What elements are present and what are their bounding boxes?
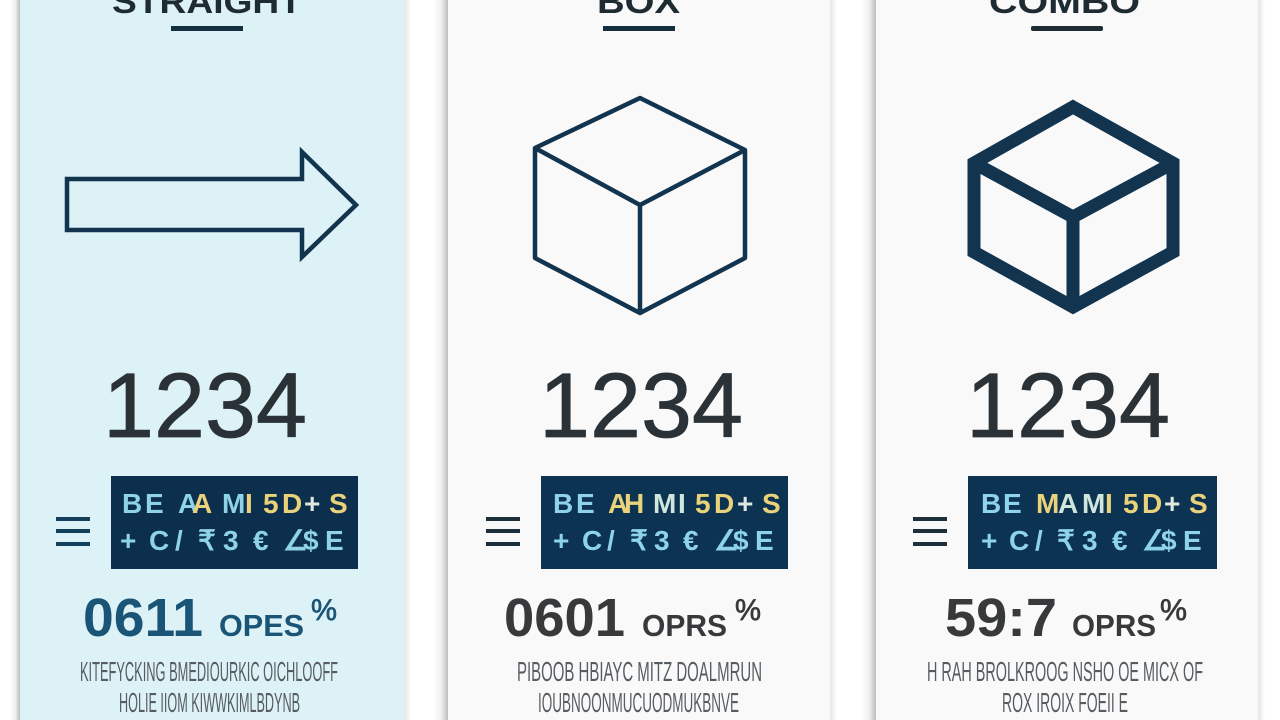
formula box: C [582,525,602,556]
formula box: 5 [695,488,711,519]
panel: box [433,0,837,720]
formula box: / [175,525,183,556]
formula box: 3 [1082,525,1098,556]
formula box: € [253,525,269,556]
formula box: D [1142,488,1162,519]
panel: straight [10,0,411,720]
icon: equals menu [913,517,947,546]
caption [517,656,762,718]
formula box: € [1112,525,1128,556]
stat: 0611 opes: OPES [219,608,304,643]
formula box: M [1082,488,1105,519]
stat: 59:7 oprs: OPRS [1072,608,1156,643]
formula box: $ [733,525,749,556]
formula box: + [553,525,569,556]
icon: thin cube [535,98,745,313]
stat: 0601 oprs: 0601 [504,588,625,648]
stat: 59:7 oprs [945,588,1187,648]
formula box: 5 [263,488,279,519]
heading: straight [112,0,302,31]
formula box: A [608,488,628,519]
formula box: / [1035,525,1043,556]
formula box: A [192,488,212,519]
formula box: ₹ [630,525,648,556]
number: 1234: 1234 [103,355,307,457]
formula box: ∠ [1142,525,1167,556]
stat: 59:7 oprs: 59:7 [945,588,1057,648]
formula box: S [329,488,348,519]
formula box: M [1036,488,1059,519]
formula box: S [762,488,781,519]
formula box: / [607,525,615,556]
formula box [968,476,1217,569]
icon: arrow [67,152,356,257]
heading: box [597,0,680,31]
number: 1234: 1234 [966,355,1170,457]
panel: straight: KITEFYCKING BMEDIOURKIC OICHLOOFF [80,656,338,687]
formula box: E [145,488,164,519]
formula box: + [981,525,997,556]
caption: ROX IROIX FOEII E [1002,687,1128,718]
formula box: E [1003,488,1022,519]
heading: combo [989,0,1140,31]
formula box: 3 [654,525,670,556]
formula box: ₹ [1057,525,1075,556]
caption: PIBOOB HBIAYC MITZ DOALMRUN [517,656,762,687]
formula box [541,476,788,569]
icon: equals menu [56,517,90,546]
caption [80,656,338,718]
formula box: + [120,525,136,556]
caption: HOLIE IIOM KIWWKIMLBDYNB [119,687,300,718]
stat: 0611 opes: 0611 [83,588,203,648]
formula box: ∠ [714,525,739,556]
formula box: € [683,525,699,556]
icon: bold cube [974,107,1173,307]
formula box: C [149,525,169,556]
formula box: + [737,488,753,519]
formula box [111,476,358,569]
formula box: E [755,525,774,556]
formula box: ₹ [198,525,216,556]
stat: 0611 opes [83,588,337,648]
formula box: E [325,525,344,556]
formula box: I [1105,488,1113,519]
formula box: D [714,488,734,519]
formula box: D [282,488,302,519]
formula box: H [624,488,644,519]
panel: combo [861,0,1265,720]
formula box: E [1183,525,1202,556]
formula box: ∠ [283,525,308,556]
stat: 59:7 oprs: % [1160,594,1187,627]
formula box: + [304,488,320,519]
formula box: + [1164,488,1180,519]
formula box: M [222,488,245,519]
formula box: B [122,488,142,519]
formula box: $ [303,525,319,556]
formula box: M [653,488,676,519]
formula box: S [1189,488,1208,519]
caption [927,656,1203,718]
formula box: C [1009,525,1029,556]
formula box: I [245,488,253,519]
icon: equals menu [486,517,520,546]
stat: 0611 opes: % [311,594,337,627]
formula box: 5 [1123,488,1139,519]
caption: IOUBNOONMUCUODMUKBNVE [538,687,739,718]
stat: 0601 oprs: % [735,594,761,627]
stat: 0601 oprs: OPRS [642,608,727,643]
number: 1234: 1234 [539,355,743,457]
formula box: $ [1161,525,1177,556]
formula box: B [981,488,1001,519]
formula box: I [678,488,686,519]
formula box: A [178,488,198,519]
formula box: 3 [223,525,239,556]
formula box: E [576,488,595,519]
formula box: A [1058,488,1078,519]
stat: 0601 oprs [504,588,761,648]
formula box: B [553,488,573,519]
